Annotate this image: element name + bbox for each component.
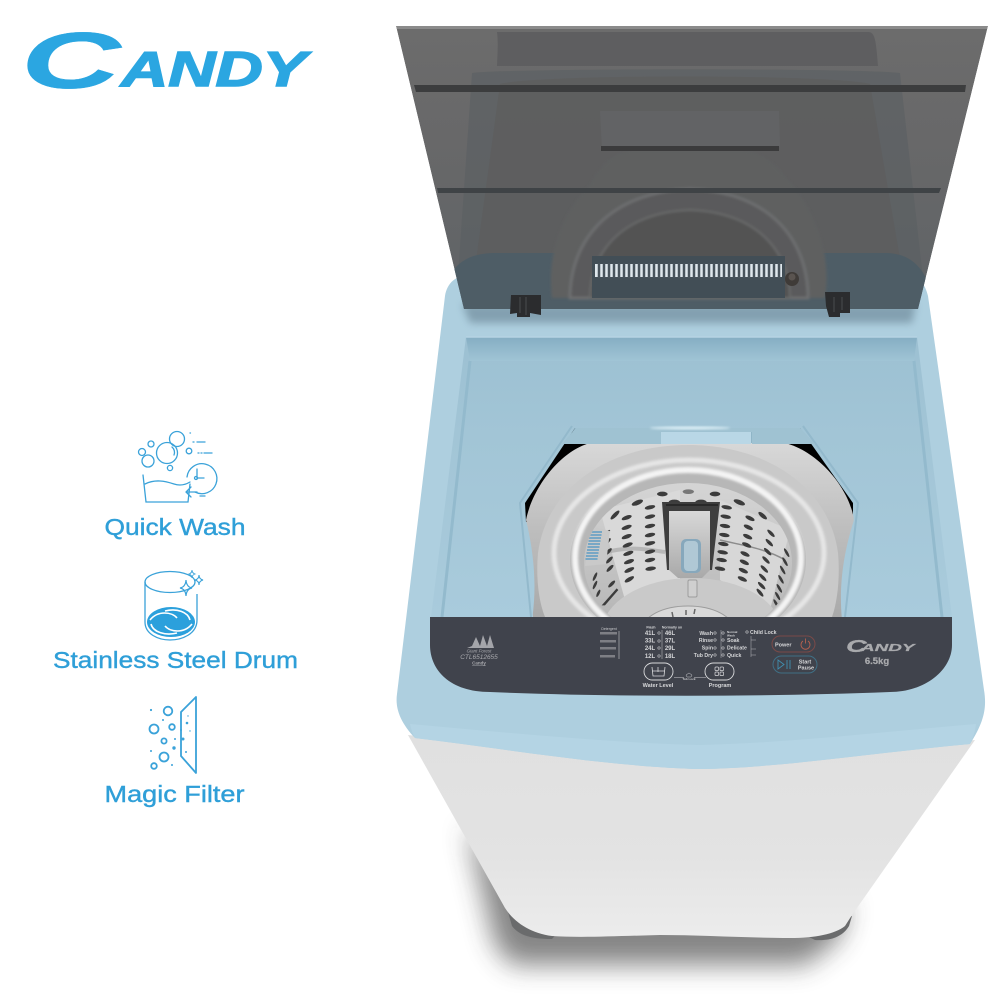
logo: Candy: ANDY <box>119 43 311 97</box>
drum interior <box>584 483 792 580</box>
icon: magic filter <box>150 697 196 773</box>
reflected filter strip <box>595 264 782 277</box>
panel: cycle labels: Child Lock <box>750 630 777 636</box>
button: program <box>705 663 734 689</box>
panel badge: Giant Forest <box>460 635 498 666</box>
panel: water level table: 37L <box>665 638 676 644</box>
panel: cycle labels: Spin <box>702 646 713 652</box>
button: water level <box>643 663 674 689</box>
panel logo: Candy 6.5kg <box>846 636 917 667</box>
tub lock indicator: Tub Lock <box>682 677 696 681</box>
panel: cycle labels: Wash <box>727 634 735 638</box>
panel: water level table: 24L <box>645 646 656 652</box>
drum outer ring <box>526 443 854 620</box>
feet <box>508 912 852 940</box>
panel logo: Candy 6.5kg: 6.5kg <box>865 656 889 667</box>
floor shadow <box>466 825 850 965</box>
lid stripes <box>414 85 966 92</box>
left hinge <box>510 295 541 317</box>
lint filter <box>602 530 610 564</box>
pulsator marks <box>672 609 695 617</box>
speckled drum wall <box>602 501 680 596</box>
panel badge: Giant Forest: Candy <box>472 660 486 666</box>
panel: cycle labels: Normal <box>727 630 738 634</box>
button: start pause: Start <box>799 660 811 666</box>
logo: Candy <box>21 15 311 105</box>
panel: water level table: 33L <box>645 638 656 644</box>
panel: cycle labels: Delicate <box>727 646 747 652</box>
panel: water level table: Flash <box>646 626 656 630</box>
blue top body <box>397 275 985 769</box>
panel: water level table: 41L <box>645 631 656 637</box>
panel: cycle labels: Wash <box>699 631 713 637</box>
shaded deck under the lid <box>462 304 916 323</box>
tub lock indicator <box>674 673 706 681</box>
reflection: inner tray <box>456 69 926 305</box>
panel: cycle labels: Quick <box>727 653 742 659</box>
panel: cycle labels: Rinse <box>699 638 713 644</box>
panel: water level table: 46L <box>665 631 676 637</box>
button: start pause: Pause <box>798 666 814 672</box>
lid knob reflection <box>785 272 799 286</box>
opening: lip around drum <box>520 426 858 617</box>
label: Quick Wash: Quick Wash <box>104 514 246 540</box>
drum floor <box>608 578 773 617</box>
logo: Candy: C <box>21 15 122 105</box>
icon: quick wash <box>138 432 217 502</box>
right hinge <box>825 292 850 317</box>
button: power: Power <box>775 642 792 648</box>
panel: cycle labels: Soak <box>727 638 740 644</box>
central agitator post <box>662 502 720 570</box>
panel badge: Giant Forest: CTL6512655 <box>460 654 498 661</box>
well: recessed inner tray <box>431 337 952 617</box>
panel: water level table: Normally on <box>662 626 682 630</box>
see-through blue band at the lid bottom <box>440 253 934 309</box>
button: start pause <box>773 656 817 673</box>
white cabinet <box>408 735 975 938</box>
label: Stainless Steel Drum: Stainless Steel Drum <box>53 647 298 673</box>
panel: water level table: 18L <box>665 654 676 660</box>
button: program: Program <box>709 683 731 689</box>
lid <box>396 26 988 309</box>
control panel <box>430 617 952 696</box>
panel: cycle labels <box>694 630 777 659</box>
blue lip tab <box>562 428 815 444</box>
button: water level: Water Level <box>643 683 674 689</box>
panel logo: Candy 6.5kg: ANDY <box>860 642 917 654</box>
icon: stainless steel drum <box>145 570 203 640</box>
panel: water level table: 12L <box>645 654 656 660</box>
reflection: recess arch <box>551 188 826 300</box>
panel: water level table <box>645 626 682 660</box>
button: power <box>772 636 815 652</box>
perforation slots <box>592 489 790 608</box>
reflection: control panel <box>497 32 878 66</box>
panel: cycle labels: Tub Dry <box>694 653 713 659</box>
panel: detergent column <box>600 627 619 659</box>
label: Magic Filter: Magic Filter <box>104 781 245 807</box>
washing machine <box>396 26 988 965</box>
panel logo: Candy 6.5kg: C <box>846 636 868 656</box>
panel: water level table: 29L <box>665 646 676 652</box>
reflection: window <box>600 111 780 151</box>
panel: detergent column: Detergent <box>601 627 617 631</box>
panel badge: Giant Forest: Giant Forest <box>467 648 492 654</box>
